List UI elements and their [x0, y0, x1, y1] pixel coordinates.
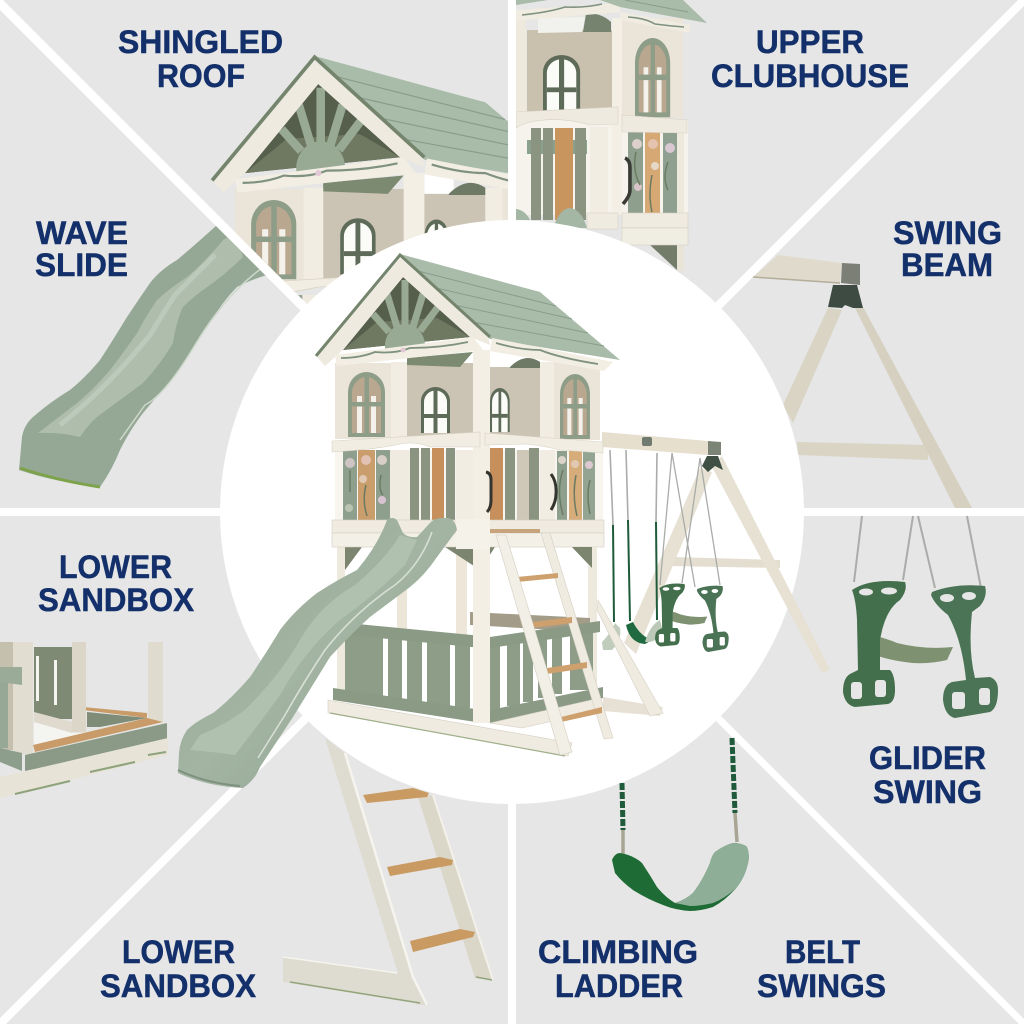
- wave slide: [178, 518, 457, 788]
- panel: lower sandbox: [0, 516, 302, 1018]
- label: swing beam: BEAM: [901, 247, 993, 283]
- lower fence and posts: [328, 547, 663, 756]
- center circle: [220, 220, 804, 804]
- label: belt swings: SWINGS: [757, 968, 886, 1004]
- swing chains and seats: [602, 450, 729, 652]
- swing set frame: [602, 432, 830, 673]
- label: wave slide: [35, 215, 128, 283]
- label: lower sandbox: LOWER: [59, 549, 172, 585]
- label: glider swing: [869, 740, 986, 810]
- climbing ladder: [496, 533, 613, 755]
- label: glider swing: SWING: [873, 774, 982, 810]
- label: swing beam: [893, 215, 1002, 283]
- label: glider swing: GLIDER: [869, 740, 986, 776]
- label: lower sandbox (bottom): [100, 934, 257, 1004]
- label: shingled roof: SHINGLED: [118, 24, 283, 60]
- label: shingled roof: ROOF: [157, 58, 245, 94]
- illustration: glider swing: [843, 516, 998, 718]
- illustration: upper clubhouse close-up: [516, 0, 707, 271]
- label: climbing ladder: LADDER: [555, 968, 683, 1004]
- panel: glider swing: [521, 516, 1024, 1019]
- illustration: sandbox corner: [0, 642, 168, 798]
- panel: belt swings: [516, 521, 1019, 1024]
- illustration: shingled roof close-up: [210, 54, 508, 304]
- label: wave slide: WAVE: [36, 215, 128, 251]
- illustration: ladder: [283, 738, 493, 1005]
- label: lower sandbox (bottom): SANDBOX: [100, 968, 257, 1004]
- label: climbing ladder: [538, 934, 698, 1004]
- tower: roof, windows, walls, deck: [316, 254, 620, 570]
- panel: upper clubhouse: [516, 0, 1018, 302]
- label: climbing ladder: CLIMBING: [538, 934, 698, 970]
- illustration: belt swing: [612, 738, 749, 911]
- label: upper clubhouse: [711, 24, 909, 94]
- label: lower sandbox: [38, 549, 195, 618]
- panel: shingled roof: [3, 0, 508, 304]
- label: upper clubhouse: CLUBHOUSE: [711, 58, 909, 94]
- panel: wave slide: [0, 10, 300, 508]
- label: lower sandbox (bottom): LOWER: [122, 934, 235, 970]
- illustration: wave slide: [19, 226, 266, 488]
- label: wave slide: SLIDE: [35, 247, 128, 283]
- center illustration: complete playset: [178, 254, 830, 788]
- label: swing beam: SWING: [893, 215, 1002, 251]
- label: belt swings: [757, 934, 886, 1004]
- label: shingled roof: [118, 24, 283, 94]
- panel: swing beam: [522, 6, 1024, 508]
- label: upper clubhouse: UPPER: [756, 24, 864, 60]
- panel: climbing ladder: [6, 522, 508, 1024]
- label: lower sandbox: SANDBOX: [38, 582, 195, 618]
- illustration: swing beam A-frame: [753, 255, 972, 508]
- label: belt swings: BELT: [785, 934, 860, 970]
